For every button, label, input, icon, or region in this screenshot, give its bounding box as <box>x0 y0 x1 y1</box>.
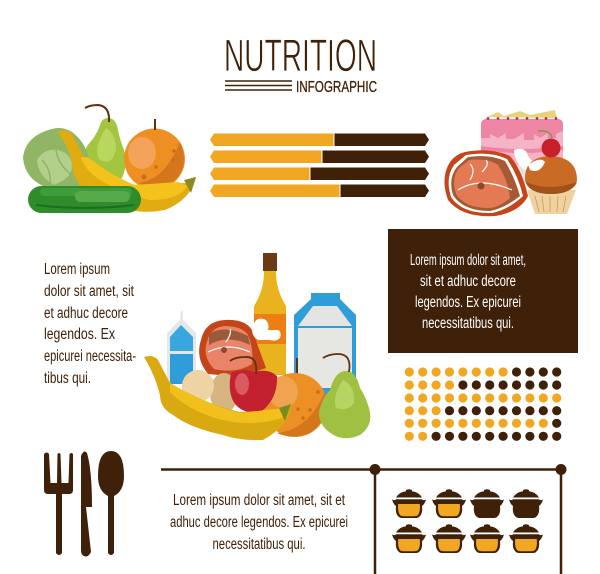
bar 3 <box>210 168 429 180</box>
left text block: Lorem ipsum <box>44 261 110 278</box>
icon: fork <box>44 452 73 555</box>
bottom text block <box>170 492 348 553</box>
dark text panel <box>388 229 578 353</box>
bar 1 <box>210 134 429 146</box>
dark text panel: legendos. Ex epicurei <box>415 294 521 311</box>
icon: knife <box>81 452 92 556</box>
illustration: fruit and vegetable group <box>23 105 196 213</box>
ham <box>444 150 528 216</box>
left text block: tibus qui. <box>44 370 91 387</box>
title: INFOGRAPHIC <box>296 79 377 96</box>
cucumber <box>28 186 141 213</box>
bottle <box>254 253 286 375</box>
bottom text block: adhuc decore legendos. Ex epicurei <box>170 514 348 531</box>
bar 4 <box>210 184 429 197</box>
orange <box>263 358 327 437</box>
orange <box>124 119 185 190</box>
milk carton small <box>167 311 196 384</box>
icon: fork knife spoon <box>44 451 124 556</box>
pear <box>85 105 126 182</box>
ham bone <box>252 319 281 341</box>
illustration: central food group <box>144 253 370 440</box>
dot matrix chart <box>405 367 561 441</box>
frame lines <box>161 464 566 574</box>
left text block: epicurei necessita- <box>44 348 136 365</box>
pot row 2 <box>392 524 543 553</box>
left text block <box>44 261 136 387</box>
title <box>224 30 377 96</box>
dark text panel: Lorem ipsum dolor sit amet, <box>410 252 526 269</box>
left text block: dolor sit amet, sit <box>44 283 135 300</box>
bottom text block: necessitatibus qui. <box>212 536 306 553</box>
illustration: meat and sweets group <box>444 110 577 216</box>
apple <box>230 357 277 413</box>
pear <box>319 354 370 438</box>
pot row 1 <box>392 489 543 518</box>
left text block: et adhuc decore <box>44 305 128 322</box>
progress bars <box>210 134 429 197</box>
dark text panel: necessitatibus qui. <box>422 315 514 332</box>
title: NUTRITION <box>224 30 377 81</box>
ham <box>199 320 266 377</box>
bottom text block: Lorem ipsum dolor sit amet, sit et <box>173 492 346 509</box>
cake <box>481 110 563 183</box>
potatoes <box>182 370 238 413</box>
pot icons <box>392 489 543 553</box>
cabbage <box>23 128 88 188</box>
banana <box>144 356 292 440</box>
banana <box>57 130 196 212</box>
cupcake <box>525 131 577 214</box>
milk carton large <box>294 293 356 400</box>
icon: spoon <box>98 451 124 555</box>
dark text panel: sit et adhuc decore <box>420 273 516 290</box>
ham bone <box>514 149 547 172</box>
bar 2 <box>210 150 429 163</box>
left text block: legendos. Ex <box>44 326 115 343</box>
